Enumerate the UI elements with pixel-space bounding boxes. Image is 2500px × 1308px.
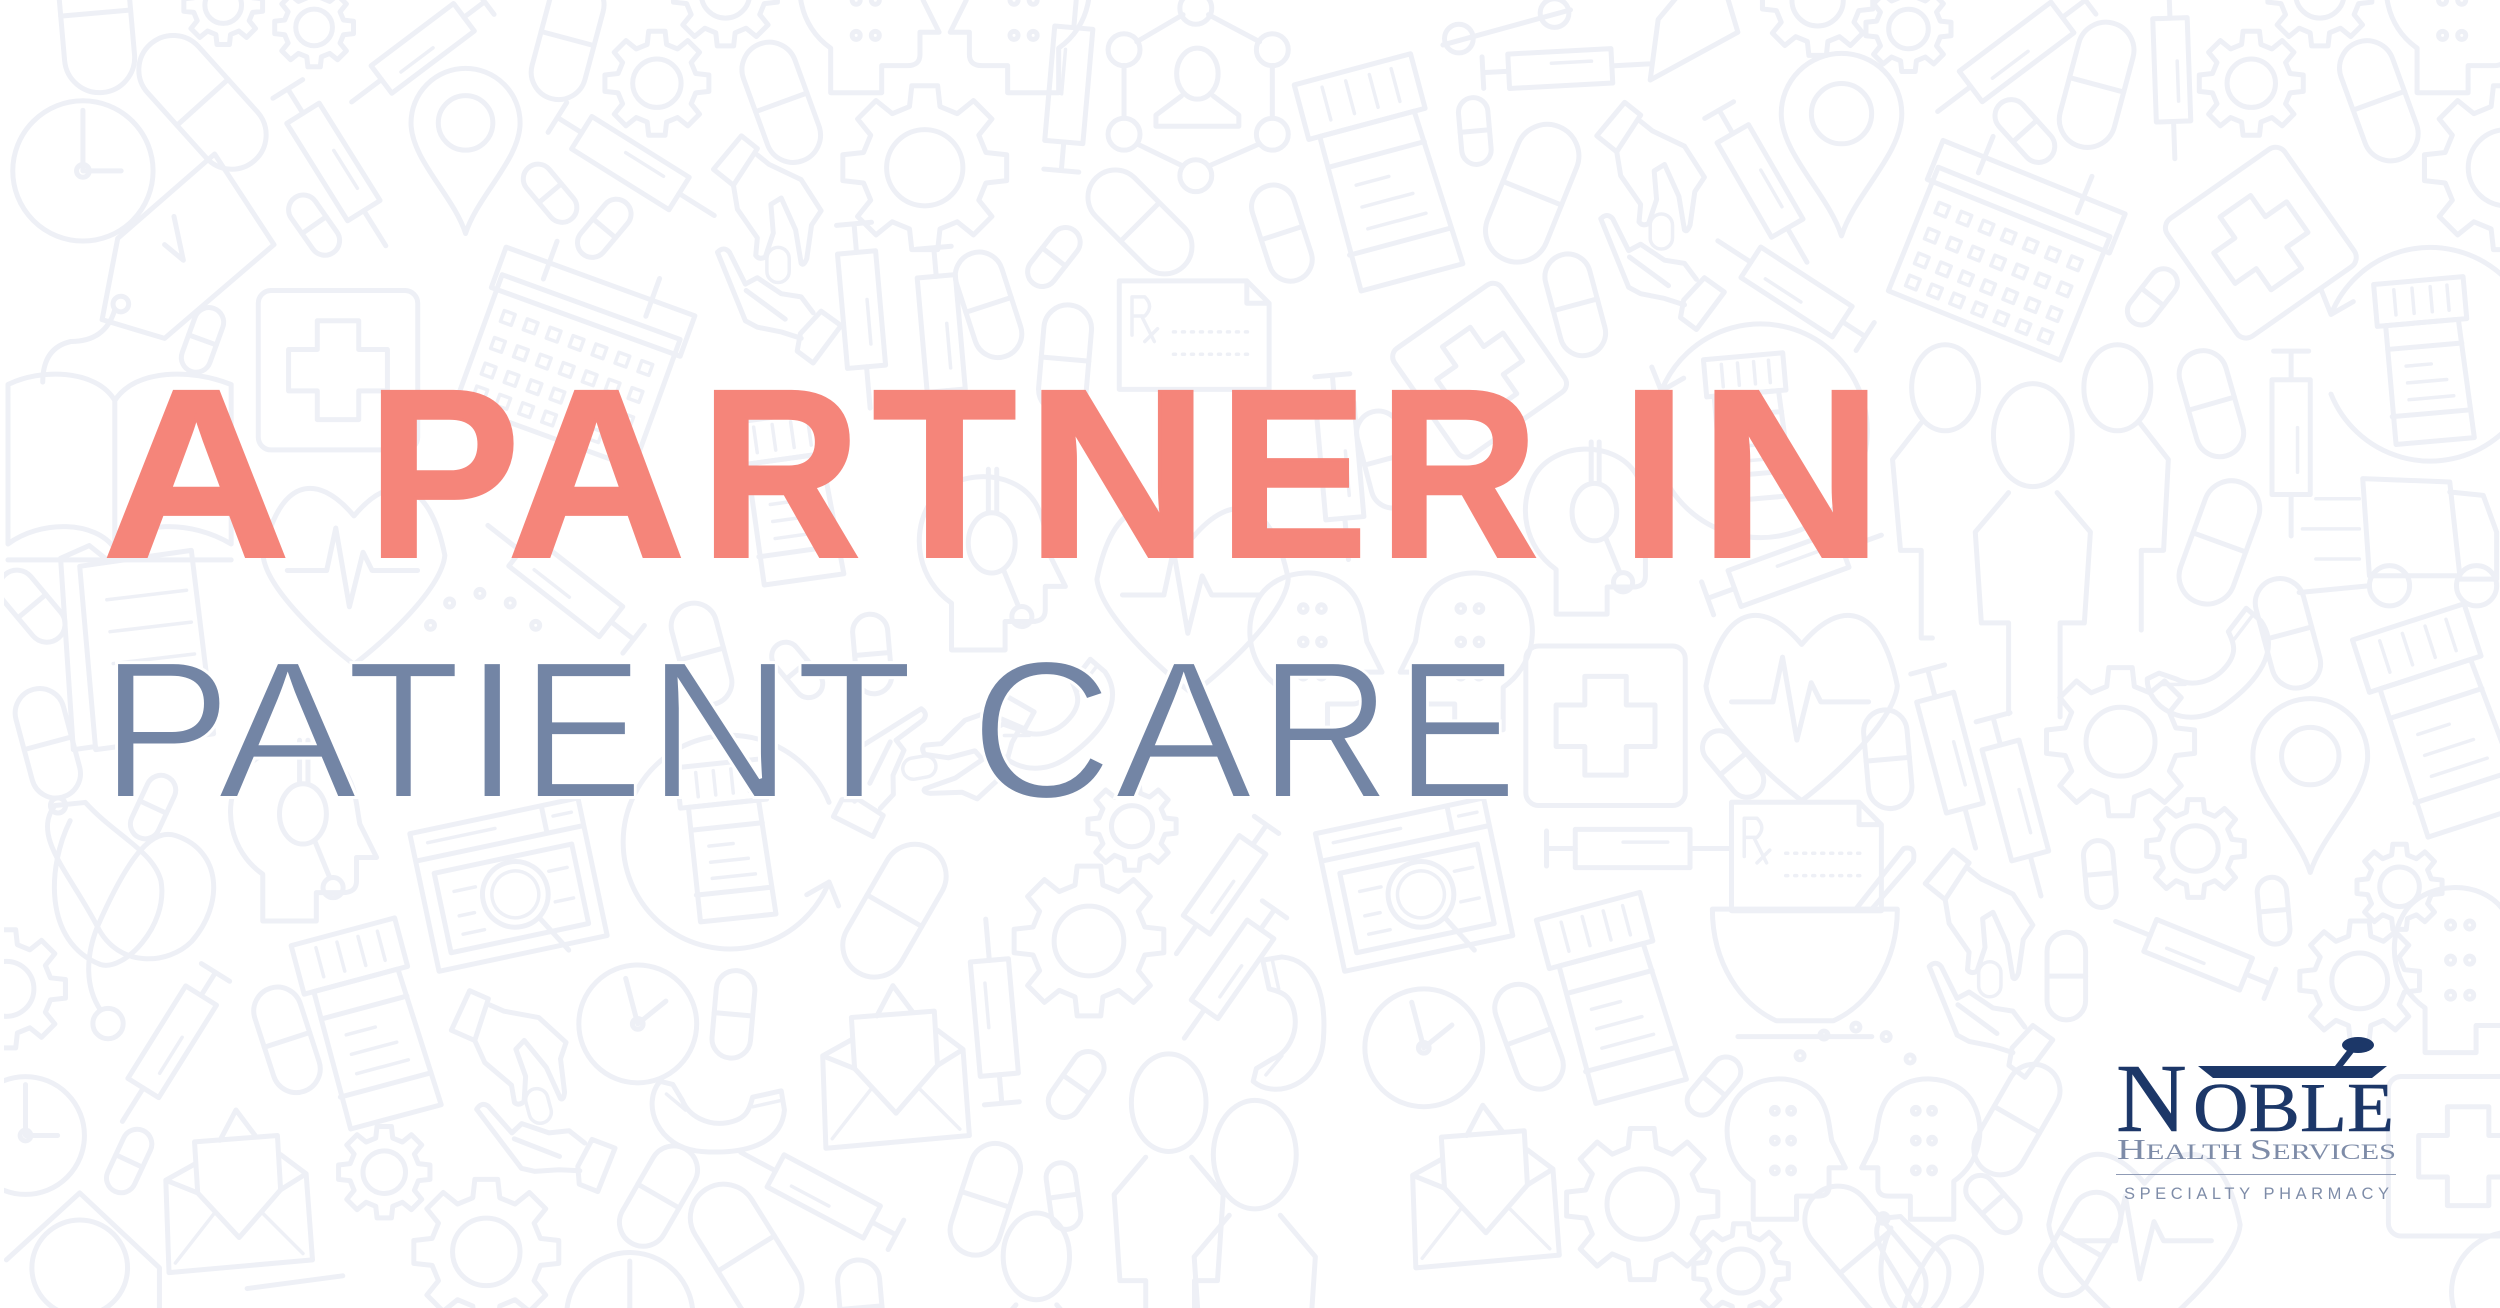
title: A PARTNER IN: A xyxy=(102,340,283,608)
subtitle: PATIENT CARE: T xyxy=(796,620,909,840)
title: A PARTNER IN: N xyxy=(1026,340,1209,608)
subtitle: PATIENT CARE: T xyxy=(347,620,460,840)
subtitle: PATIENT CARE: R xyxy=(1260,620,1391,840)
icon: mortar and pestle xyxy=(2198,1037,2387,1078)
title: A PARTNER IN: R xyxy=(700,340,860,608)
subtitle: PATIENT CARE: N xyxy=(647,620,793,840)
title: A PARTNER IN: E xyxy=(1218,340,1368,608)
logo: Noble Health Services Specialty Pharmacy xyxy=(2116,1037,2396,1203)
title: A PARTNER IN: A xyxy=(508,340,686,608)
subtitle: PATIENT CARE: I xyxy=(465,620,520,840)
subtitle: PATIENT CARE: A xyxy=(1114,620,1253,840)
title: A PARTNER IN: I xyxy=(1620,340,1687,608)
subtitle: PATIENT CARE: A xyxy=(218,620,358,840)
title: A PARTNER IN: P xyxy=(367,340,520,608)
subtitle: PATIENT CARE: C xyxy=(971,620,1112,840)
subtitle: PATIENT CARE: P xyxy=(100,620,231,840)
logo line: Health Services: H EALTH S ERVICES xyxy=(2117,1134,2396,1166)
subtitle: PATIENT CARE: E xyxy=(1396,620,1517,840)
title: A PARTNER IN: T xyxy=(872,340,1016,608)
title: A PARTNER IN: N xyxy=(1699,340,1883,608)
left edge margin xyxy=(0,0,4,1308)
logo divider xyxy=(2116,1174,2396,1175)
logo wordmark: Noble: N xyxy=(2116,1045,2187,1153)
subtitle: PATIENT CARE: E xyxy=(522,620,643,840)
logo wordmark: Noble: OBLE xyxy=(2193,1070,2394,1147)
logo line: Specialty Pharmacy: SPECIALTY PHARMACY xyxy=(2124,1185,2389,1203)
title: A PARTNER IN: R xyxy=(1378,340,1538,608)
